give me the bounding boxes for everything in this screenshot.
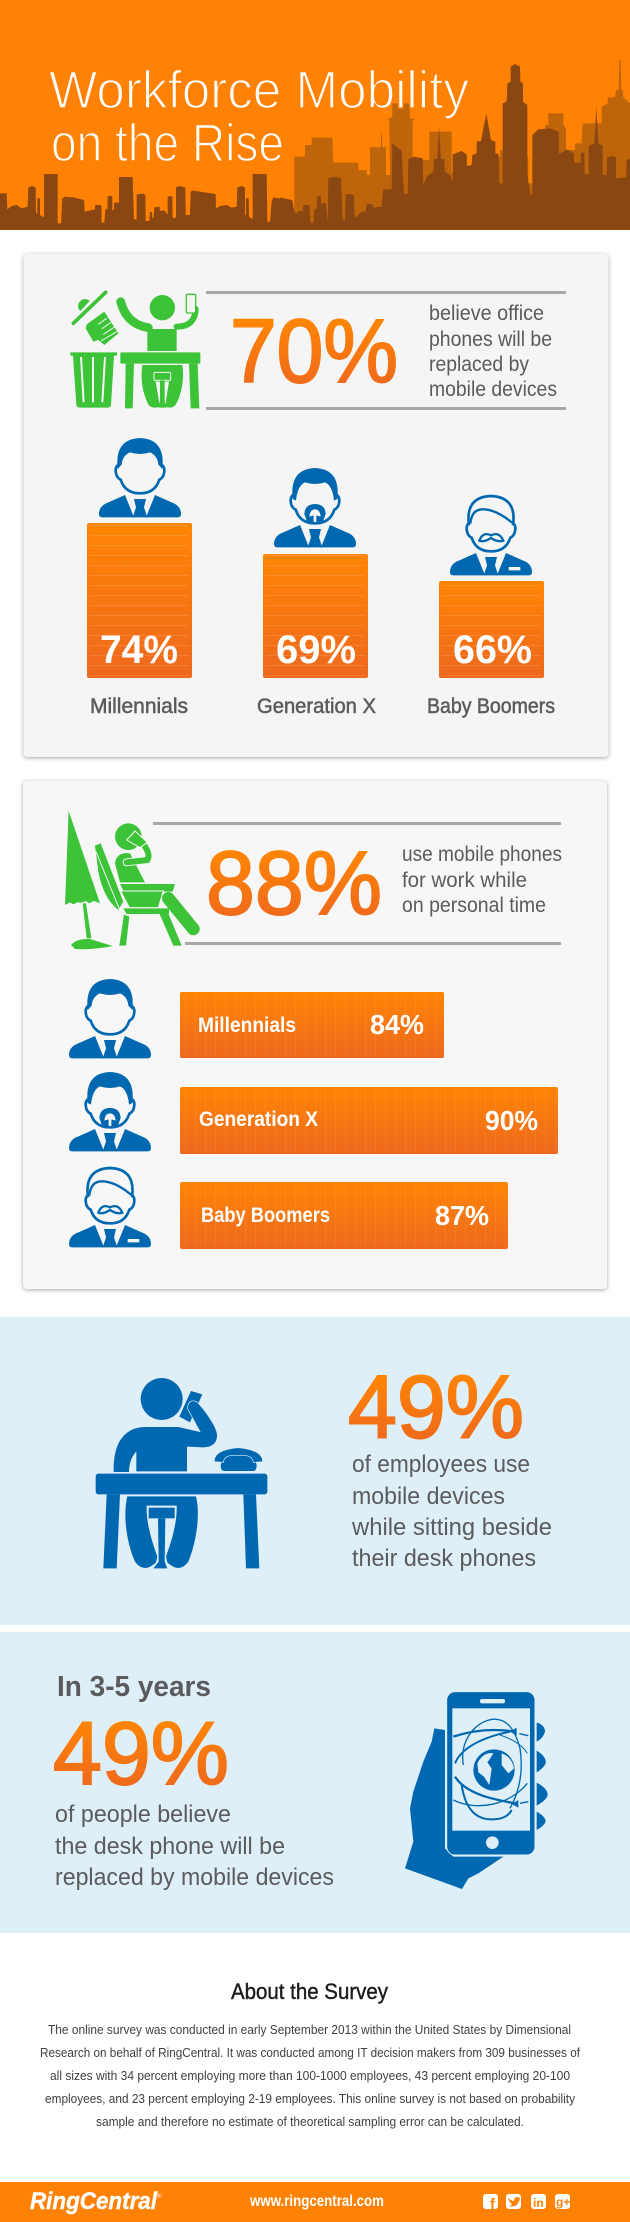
icon: facebook [483,2194,498,2213]
bar: millennials 84% [180,992,444,1058]
survey description: sample and therefore no estimate of theoretical sampling error can be calculated. [96,2114,524,2129]
panel: office phones replaced [24,254,608,757]
bar: millennials 74%: 74% [100,628,178,672]
icon: facebook: f [490,2196,496,2213]
stat description: use mobile phones [402,843,562,866]
bar: millennials 84%: Millennials [198,1014,296,1037]
icon: twitter [506,2194,521,2209]
icon: baby boomer [69,1168,151,1247]
bar: baby boomers 66% [439,581,544,678]
stat description: replaced by [429,353,529,376]
icon: person at desk throwing office phone in trash [70,292,200,408]
section: about the survey [40,1979,580,2129]
icon: baby boomer [450,496,532,575]
title: Workforce Mobility [49,61,469,120]
bar labels: Millennials [90,695,188,718]
bar: baby boomers 66%: 66% [453,628,532,672]
icon: millennial [99,438,181,517]
stat description: of people believe [55,1801,231,1828]
stat description: mobile devices [429,378,557,401]
bar labels: Baby Boomers [427,695,555,718]
stat description: replaced by mobile devices [55,1864,334,1891]
stat description [429,302,557,401]
footer bar [0,2182,630,2222]
stat description: their desk phones [352,1545,536,1572]
title [49,61,469,173]
bar: generation x 69% [263,554,368,678]
stat description: for work while [402,869,527,892]
logo: ringcentral: ® [157,2193,162,2200]
skyline: front buildings left [0,174,294,230]
icon: google plus: g+ [556,2195,570,2209]
panel: mobile use on personal time [23,781,607,1289]
stat: 49%: 49% [348,1356,524,1456]
stat description: mobile devices [352,1483,505,1510]
bar labels: Generation X [257,695,376,718]
bar: baby boomers 87% [180,1182,508,1249]
icon: millennial [69,979,151,1058]
survey description: all sizes with 34 percent employing more than 100-1000 employees, 43 percent employing 20-100 [50,2068,570,2083]
survey description: Research on behalf of RingCentral. It was conducted among IT decision makers from 309 businesses of [40,2045,580,2060]
stat: 88%: 88% [206,834,382,934]
icon: person on beach chair with phone [65,811,193,949]
bar: generation x 69%: 69% [276,628,356,672]
bar: baby boomers 87%: Baby Boomers [201,1204,330,1227]
survey description: The online survey was conducted in early September 2013 within the United States by Dimensional [48,2022,571,2037]
skyline: back buildings [294,60,630,230]
bar: millennials 74% [87,523,192,678]
survey description: employees, and 23 percent employing 2-19 employees. This online survey is not based on probability [45,2091,575,2106]
heading: about the survey: About the Survey [231,1979,388,2004]
icon: person at desk on mobile beside desk phone [96,1378,267,1569]
stat description: the desk phone will be [55,1833,285,1860]
stat description: while sitting beside [351,1514,552,1541]
panel: mobile beside desk phone [0,1317,630,1625]
heading: in 3-5 years: In 3-5 years [57,1671,211,1703]
survey description [40,2022,580,2129]
stat description: of employees use [352,1451,530,1478]
icon: linkedin [531,2194,546,2210]
stat description: phones will be [429,328,552,351]
skyline: front buildings right [280,64,630,230]
website url: www.ringcentral.com [249,2193,384,2210]
bar: generation x 90%: Generation X [199,1108,318,1131]
icon: linkedin: in [533,2196,544,2210]
title: on the Rise [51,114,284,173]
stat: 49%: 49% [53,1703,229,1803]
bar: millennials 84%: 84% [370,1009,424,1040]
bar: baby boomers 87%: 87% [435,1200,489,1231]
stat description: believe office [429,302,544,325]
stat description [351,1451,552,1572]
icon: hand holding smartphone with globe [405,1692,548,1889]
panel: desk phone replaced in 3-5 years [0,1632,630,1933]
bar: generation x 90% [180,1087,558,1154]
stat: 70%: 70% [230,302,398,402]
icon: generation x [69,1072,151,1151]
rule [206,291,566,294]
stat description [55,1801,334,1891]
header banner [0,0,630,230]
stat description [402,843,562,917]
icon: generation x [274,468,356,547]
stat description: on personal time [402,894,546,917]
bar: generation x 90%: 90% [485,1105,538,1136]
bar labels [90,695,555,718]
logo: ringcentral: RingCentral [30,2188,158,2215]
rule [153,822,561,825]
